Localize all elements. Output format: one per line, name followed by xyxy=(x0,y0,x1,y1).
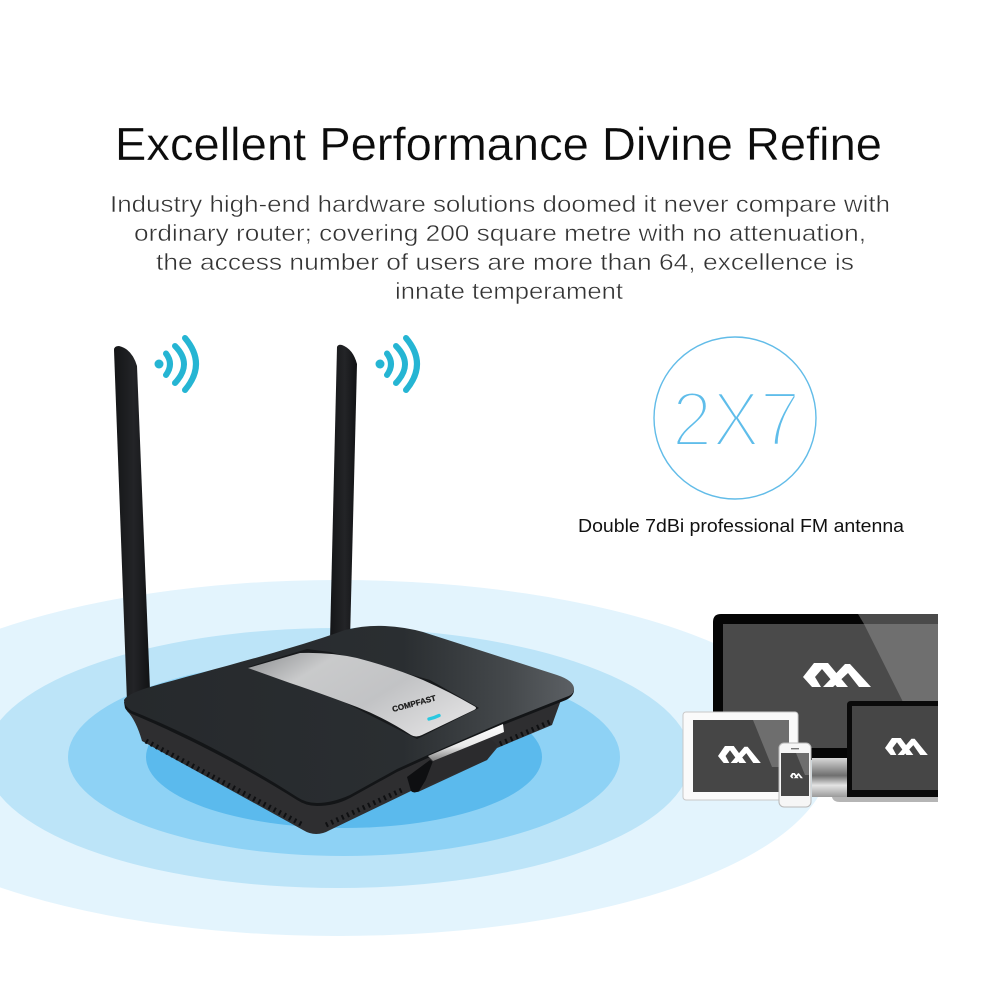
tablet logo xyxy=(718,746,761,763)
icon: wifi signal left xyxy=(154,338,196,390)
antenna caption: Double 7dBi professional FM antenna xyxy=(578,515,905,536)
intro text block: the access number of users are more than 64, excellence is xyxy=(156,249,854,275)
brand label: COMPFAST xyxy=(391,694,437,714)
right antenna xyxy=(330,345,357,640)
intro text block: ordinary router; covering 200 square metre with no attenuation, xyxy=(134,220,866,246)
router xyxy=(114,345,574,834)
intro text block: Industry high-end hardware solutions doomed it never compare with xyxy=(110,191,890,217)
icon: wifi signal right xyxy=(376,338,417,390)
router rim xyxy=(124,690,574,806)
chrome handle xyxy=(428,724,504,761)
title: Excellent Performance Divine Refine xyxy=(115,118,882,170)
left antenna xyxy=(114,346,150,702)
laptop logo xyxy=(885,738,928,755)
monitor xyxy=(713,614,938,797)
intro text block: innate temperament xyxy=(395,278,624,304)
router body xyxy=(127,690,561,834)
monitor logo xyxy=(803,663,871,687)
router vents xyxy=(146,721,552,825)
intro text block xyxy=(110,191,890,304)
phone logo xyxy=(790,773,803,778)
signal coverage rings xyxy=(0,580,830,936)
front notch xyxy=(407,760,433,792)
tablet xyxy=(683,712,798,800)
antenna badge 2X7: 2X7 xyxy=(672,375,800,463)
status LED xyxy=(429,716,439,719)
laptop xyxy=(832,701,938,802)
silver panel xyxy=(248,653,476,736)
router top surface xyxy=(124,626,574,803)
antenna badge 2X7 xyxy=(654,337,816,499)
devices group xyxy=(683,614,938,807)
phone xyxy=(779,743,811,807)
silver panel slot xyxy=(248,649,479,739)
